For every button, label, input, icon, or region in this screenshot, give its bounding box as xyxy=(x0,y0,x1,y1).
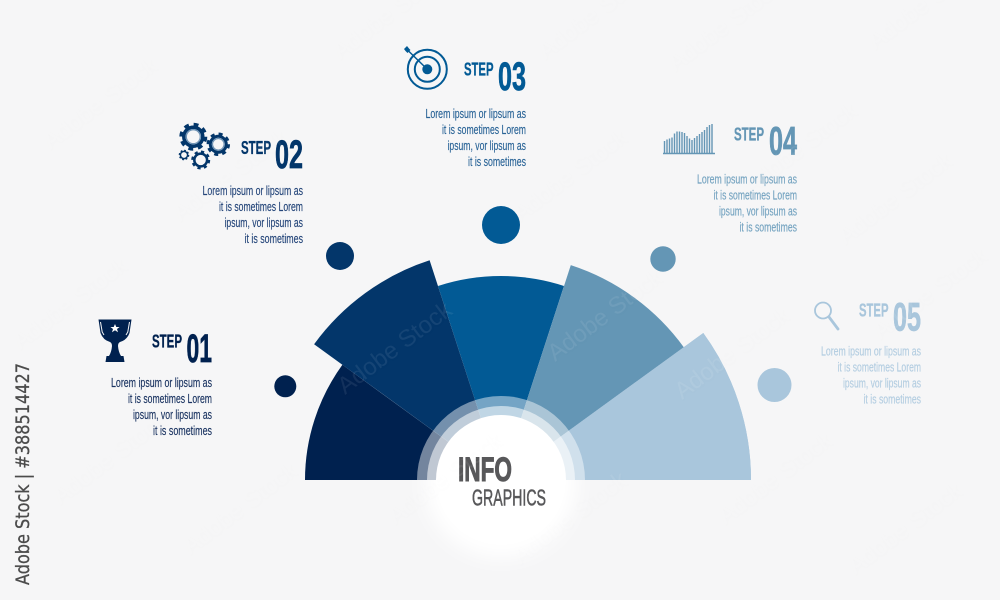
faint repeated watermark: Adobe Stock xyxy=(37,51,163,155)
description xyxy=(111,376,212,438)
step 01 xyxy=(98,320,212,438)
sector 1 xyxy=(305,365,501,480)
description: ipsum, vor lipsum as xyxy=(224,216,303,230)
heading: STEP xyxy=(241,138,271,158)
stock id label: Adobe Stock | #388514427 xyxy=(12,363,34,585)
faint repeated watermark: Adobe Stock xyxy=(7,251,133,355)
description xyxy=(426,107,526,169)
faint repeated watermark: Adobe Stock xyxy=(542,263,668,367)
heading xyxy=(859,296,921,340)
description: ipsum, vor lipsum as xyxy=(448,139,526,153)
description: Lorem ipsum or lipsum as xyxy=(426,107,526,121)
sector 2 xyxy=(314,260,501,480)
faint repeated watermark: Adobe Stock xyxy=(867,241,993,345)
description: it is sometimes Lorem xyxy=(128,392,212,406)
semicircle chart xyxy=(305,260,751,480)
sector 5 overlap xyxy=(501,333,751,480)
description: it is sometimes Lorem xyxy=(219,200,303,214)
faint repeated watermark: Adobe Stock xyxy=(669,301,795,405)
step 03 xyxy=(404,46,526,169)
heading: STEP xyxy=(734,125,764,145)
sector 4 xyxy=(501,265,684,480)
faint repeated watermark: Adobe Stock xyxy=(167,123,293,227)
heading xyxy=(734,120,797,164)
description: it is sometimes xyxy=(468,155,526,169)
description: it is sometimes Lorem xyxy=(838,360,921,374)
faint repeated watermark: Adobe Stock xyxy=(842,476,968,580)
faint repeated watermark: Adobe Stock xyxy=(507,123,633,227)
description: Lorem ipsum or lipsum as xyxy=(111,376,212,390)
icon: bar chart xyxy=(663,124,715,154)
step 04 xyxy=(663,120,797,234)
description: it is sometimes Lorem xyxy=(442,123,526,137)
heading: STEP xyxy=(152,332,182,352)
description: it is sometimes xyxy=(864,392,921,406)
description: it is sometimes xyxy=(740,220,797,234)
icon: gears xyxy=(180,125,228,168)
centre title: INFO xyxy=(458,451,512,489)
heading: STEP xyxy=(859,300,888,320)
sector 3 xyxy=(438,276,564,480)
faint repeated watermark: Adobe Stock xyxy=(382,426,508,530)
centre title xyxy=(458,451,546,510)
faint repeated watermark: Adobe Stock xyxy=(712,426,838,530)
heading xyxy=(241,133,303,177)
sector 5 xyxy=(501,333,751,480)
soft glow under centre circle xyxy=(425,406,577,558)
marker dots xyxy=(274,206,792,402)
heading: 03 xyxy=(498,55,526,99)
description: it is sometimes Lorem xyxy=(714,188,797,202)
step 05 xyxy=(815,296,921,406)
description xyxy=(821,344,921,406)
heading xyxy=(464,55,526,99)
faint repeated watermark: Adobe Stock xyxy=(177,456,303,560)
faint repeated watermark: Adobe Stock xyxy=(47,406,173,510)
icon: trophy xyxy=(98,320,132,362)
icon: magnifier xyxy=(815,302,838,329)
description: it is sometimes xyxy=(244,232,303,246)
description: it is sometimes xyxy=(153,424,212,438)
centre rings xyxy=(417,396,585,480)
centre title: GRAPHICS xyxy=(472,484,546,510)
faint repeated watermark: Adobe Stock xyxy=(832,146,958,250)
heading: 02 xyxy=(275,133,303,177)
heading: 04 xyxy=(769,120,797,164)
step 02 xyxy=(180,125,303,246)
heading xyxy=(152,327,212,371)
heading: STEP xyxy=(464,60,494,80)
heading: 01 xyxy=(186,327,212,371)
faint repeated watermark: Adobe Stock xyxy=(332,296,458,400)
description: Lorem ipsum or lipsum as xyxy=(697,172,797,186)
description: ipsum, vor lipsum as xyxy=(843,376,921,390)
description: Lorem ipsum or lipsum as xyxy=(821,344,921,358)
description: Lorem ipsum or lipsum as xyxy=(202,184,303,198)
faint repeated watermark: Adobe Stock xyxy=(737,96,863,200)
description xyxy=(697,172,797,234)
description: ipsum, vor lipsum as xyxy=(719,204,797,218)
description xyxy=(202,184,303,246)
icon: target xyxy=(404,46,447,89)
faint repeated watermark: Adobe Stock xyxy=(507,466,633,570)
heading: 05 xyxy=(893,296,921,340)
description: ipsum, vor lipsum as xyxy=(133,408,212,422)
